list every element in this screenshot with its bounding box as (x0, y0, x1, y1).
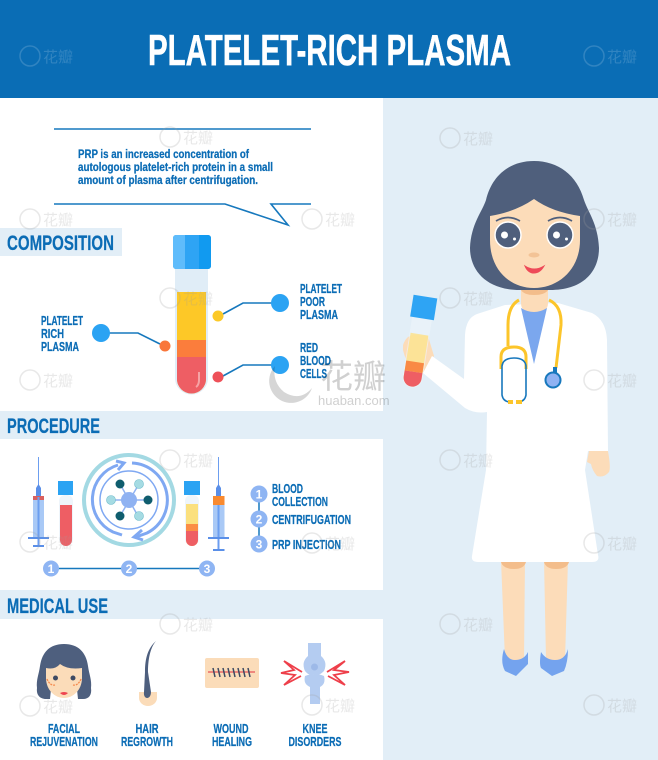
callout: red blood cells (212, 340, 331, 382)
chart: composition test tube (173, 235, 211, 395)
watermark: huaban small marks: 花瓣 (183, 291, 213, 308)
labels: medical uses: FACIAL (48, 721, 80, 736)
legend: procedure steps (250, 481, 351, 552)
callout: platelet poor plasma: PLASMA (300, 307, 338, 322)
panel: right background (383, 98, 658, 760)
legs (501, 560, 569, 660)
watermark: huaban large (269, 358, 390, 408)
icon: blood tube (58, 481, 73, 546)
scrubs collar (521, 308, 547, 364)
watermark: huaban small marks: 花瓣 (183, 130, 213, 147)
hair (470, 161, 599, 290)
icon: separated tube (184, 481, 200, 546)
face (490, 199, 580, 288)
watermark: huaban small marks: 花瓣 (325, 536, 355, 553)
heading: procedure (0, 411, 383, 439)
watermark: huaban small marks: 花瓣 (607, 49, 637, 66)
legend: procedure steps: CENTRIFUGATION (272, 512, 351, 527)
legend: procedure steps: COLLECTION (272, 494, 328, 509)
callout: red blood cells: CELLS (300, 366, 327, 381)
heading: medical use: MEDICAL USE (7, 595, 108, 618)
watermark: huaban small marks: 花瓣 (607, 698, 637, 715)
shoes (502, 649, 568, 676)
icon: knee disorders (281, 643, 349, 704)
watermark: huaban small marks: 花瓣 (43, 699, 73, 716)
watermark: huaban small marks: 花瓣 (463, 131, 493, 148)
callout: PRP definition: autologous platelet-rich protein in a small (78, 162, 273, 174)
timeline: steps 1 to 3: 1 (48, 562, 55, 576)
watermark: huaban small marks: 花瓣 (325, 698, 355, 715)
callout: platelet poor plasma: PLATELET (300, 281, 342, 296)
illustration: doctor (399, 161, 610, 676)
stethoscope (501, 300, 561, 402)
test tube in hand (399, 295, 437, 389)
callout: platelet poor plasma (212, 281, 342, 322)
labels: medical uses: KNEE (302, 721, 328, 736)
labels: medical uses: REJUVENATION (30, 734, 98, 749)
lab coat (423, 303, 608, 562)
icon: wound healing (205, 658, 259, 688)
watermark: huaban small marks: 花瓣 (607, 536, 637, 553)
legend: procedure steps: 2 (256, 512, 263, 526)
icon: filled syringe (208, 457, 229, 551)
timeline: steps 1 to 3: 2 (126, 562, 133, 576)
watermark: huaban small marks: 花瓣 (43, 49, 73, 66)
watermark: huaban small marks: 花瓣 (43, 212, 73, 229)
callout: platelet rich plasma (41, 313, 170, 354)
heading: medical use (0, 590, 383, 619)
watermark: huaban small marks: 花瓣 (325, 212, 355, 229)
icon: centrifuge (84, 455, 174, 545)
callout: platelet rich plasma: RICH (41, 326, 64, 341)
hand: right (587, 451, 610, 476)
labels: medical uses: HEALING (212, 734, 252, 749)
timeline: steps 1 to 3: 3 (204, 562, 211, 576)
labels: medical uses: REGROWTH (121, 734, 173, 749)
watermark: huaban small marks: 花瓣 (463, 291, 493, 308)
legend: procedure steps: 1 (256, 488, 263, 502)
legend: procedure steps: BLOOD (272, 481, 303, 496)
legend: procedure steps: PRP INJECTION (272, 537, 341, 552)
watermark: huaban small marks: 花瓣 (43, 535, 73, 552)
watermark: huaban large: huaban.com (318, 393, 390, 408)
icon: hair regrowth (139, 641, 157, 706)
callout: red blood cells: RED (300, 340, 318, 355)
callout: platelet rich plasma: PLATELET (41, 313, 83, 328)
header banner (0, 0, 658, 98)
labels: medical uses: WOUND (214, 721, 248, 736)
callout: platelet poor plasma: POOR (300, 294, 325, 309)
watermark: huaban small marks: 花瓣 (607, 373, 637, 390)
heading: procedure: PROCEDURE (7, 415, 100, 438)
callout: red blood cells: BLOOD (300, 353, 331, 368)
nose and mouth (525, 252, 544, 273)
watermark: huaban small marks: 花瓣 (183, 453, 213, 470)
watermark: huaban small marks: 花瓣 (43, 373, 73, 390)
watermark: huaban small marks: 花瓣 (607, 212, 637, 229)
watermark: huaban small marks: 花瓣 (463, 453, 493, 470)
watermark: huaban small marks: 花瓣 (463, 617, 493, 634)
watermark: huaban small marks: 花瓣 (183, 617, 213, 634)
neck (521, 285, 548, 313)
callout: PRP definition: PRP is an increased concentration of (78, 149, 249, 161)
labels: medical uses (30, 721, 342, 749)
heading: composition: COMPOSITION (7, 232, 114, 255)
legend: procedure steps: 3 (256, 538, 263, 552)
callout: PRP definition (54, 129, 311, 225)
eyes (495, 218, 573, 248)
callout: PRP definition: amount of plasma after centrifugation. (78, 175, 258, 187)
icon: facial rejuvenation (37, 644, 91, 699)
callout: platelet rich plasma: PLASMA (41, 339, 79, 354)
labels: medical uses: DISORDERS (288, 734, 342, 749)
labels: medical uses: HAIR (136, 721, 159, 736)
hand: left (403, 335, 434, 372)
heading: composition (0, 228, 122, 256)
watermark: huaban large: 花瓣 (320, 358, 386, 395)
icon: empty syringe (28, 457, 49, 547)
timeline: steps 1 to 3 (43, 560, 215, 576)
